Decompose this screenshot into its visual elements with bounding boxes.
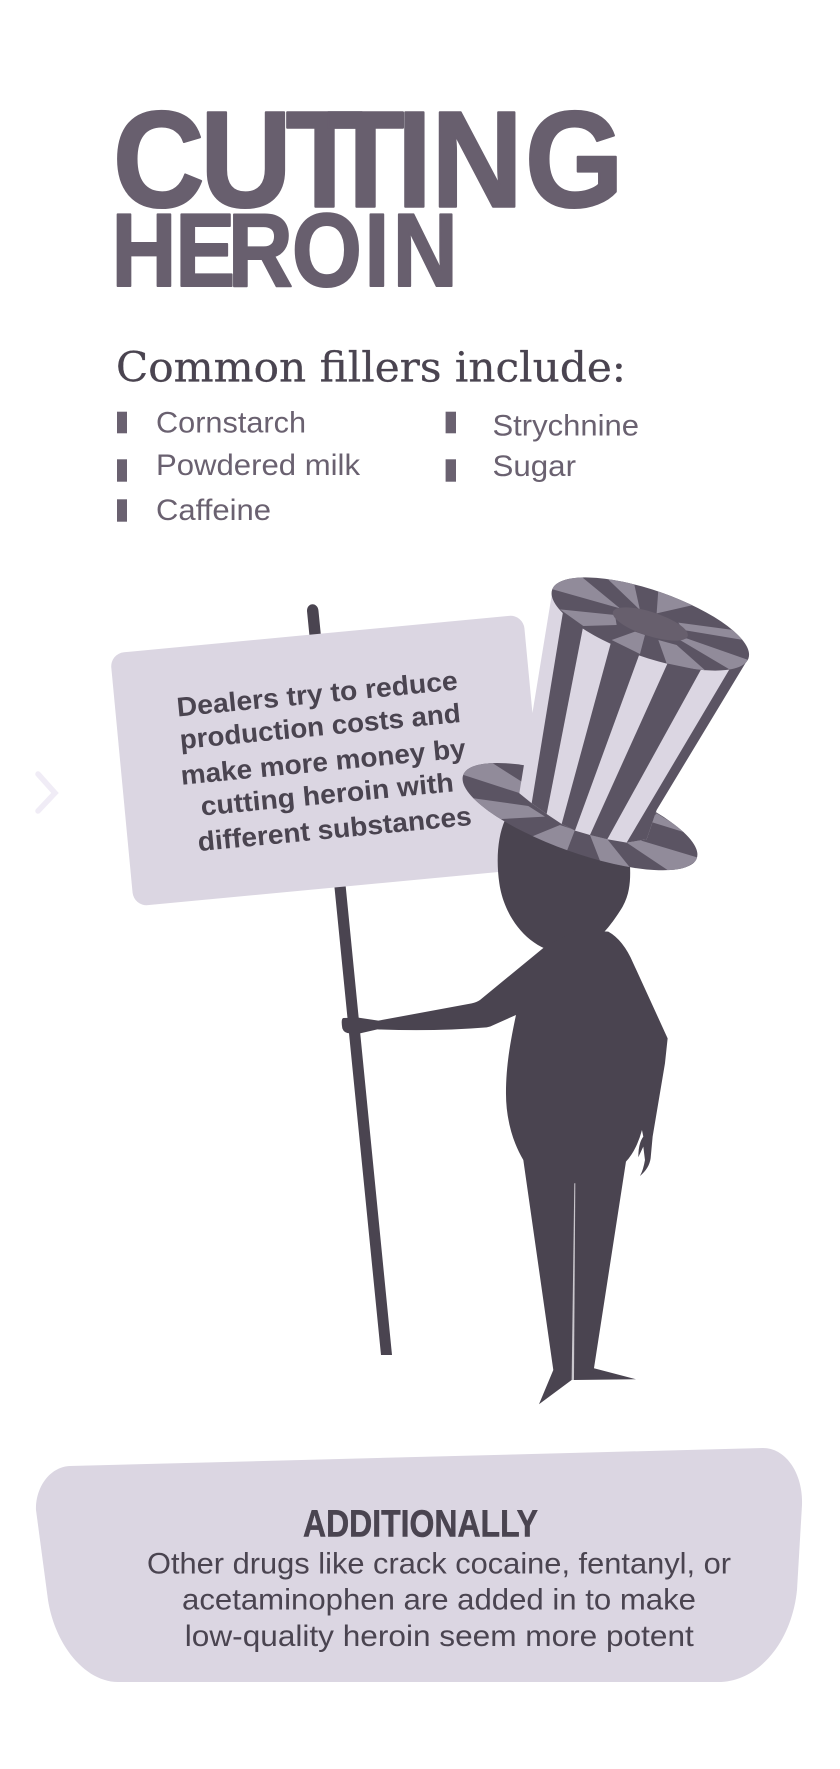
hat top: [552, 577, 750, 671]
hat brim: [462, 763, 698, 870]
sign line 3: make more money by: [179, 733, 467, 791]
item: caffeine: Caffeine: [156, 494, 271, 527]
title line: cutting: CUTTING: [113, 82, 624, 236]
body line 3: low-quality heroin seem more potent: [185, 1620, 694, 1653]
bullet: caffeine: [117, 499, 127, 522]
subheading: Common fillers include:: [116, 344, 626, 392]
sign line 1: Dealers try to reduce: [175, 666, 459, 722]
bullet: cornstarch: [117, 412, 127, 433]
hat hub: [609, 600, 691, 648]
sign text: [175, 666, 473, 857]
panel heading: ADDITIONALLY: [303, 1504, 538, 1546]
item: cornstarch: Cornstarch: [156, 407, 306, 440]
bullet: strychnine: [446, 412, 456, 433]
panel body text: [147, 1547, 731, 1653]
sign pole: [307, 604, 392, 1355]
body, arm and legs: [342, 930, 668, 1404]
sign line 5: different substances: [196, 801, 473, 857]
body line 2: acetaminophen are added in to make: [182, 1583, 696, 1616]
title: [112, 82, 624, 308]
body line 1: Other drugs like crack cocaine, fentanyl, or: [147, 1547, 731, 1580]
item: powdered milk: Powdered milk: [156, 449, 361, 482]
head: [498, 820, 630, 953]
icon: chevron arrow: [38, 774, 55, 811]
hat body with stripes: [519, 589, 748, 843]
item: sugar: Sugar: [492, 450, 576, 483]
sign board: [110, 615, 547, 906]
title line: heroin: HEROIN: [112, 192, 458, 308]
panel background: [36, 1448, 802, 1682]
item: strychnine: Strychnine: [492, 410, 639, 443]
filler list: [117, 407, 639, 527]
panel: additionally: [36, 1448, 802, 1682]
bullet: powdered milk: [117, 459, 127, 482]
sign line 2: production costs and: [178, 698, 462, 755]
top hat: [462, 577, 750, 870]
gap between legs: [572, 1183, 575, 1380]
bullet: sugar: [446, 459, 456, 482]
sign line 4: cutting heroin with: [199, 767, 455, 822]
figure silhouette: [342, 820, 668, 1404]
